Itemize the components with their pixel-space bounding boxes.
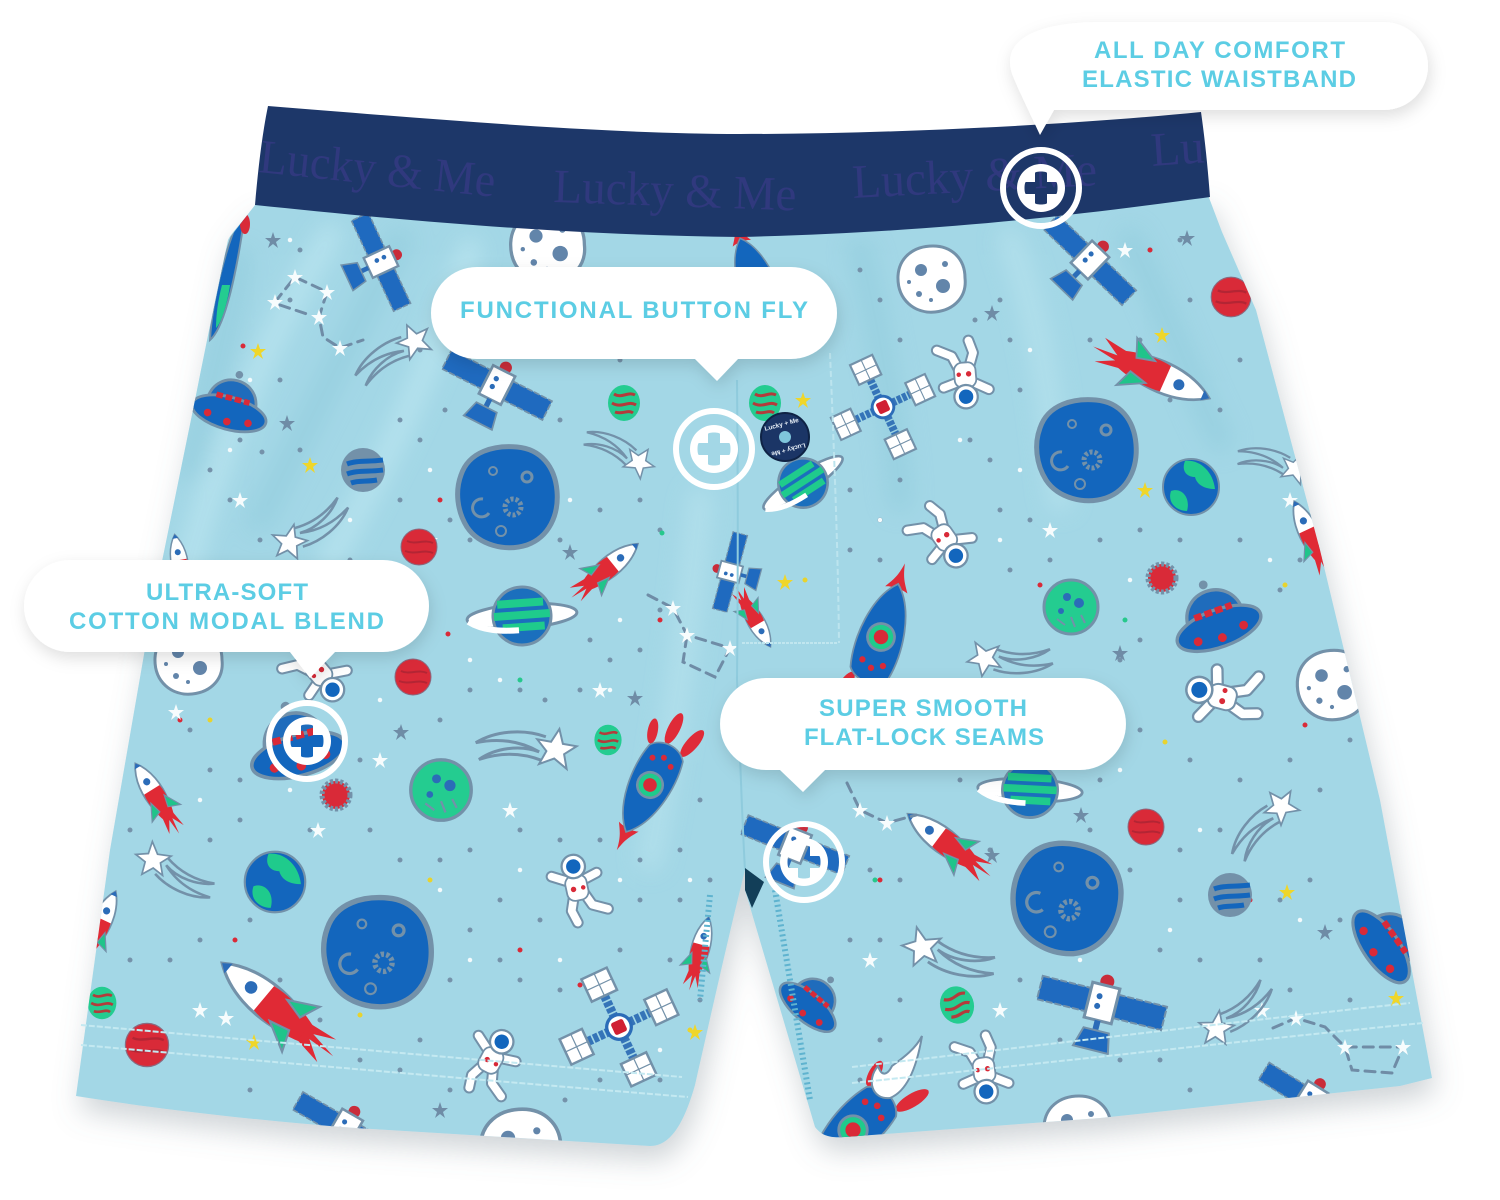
fly button [761, 413, 809, 461]
crotch opening shadow [745, 868, 764, 908]
print: ringed planets [465, 266, 1084, 820]
fly button: Lucky + Me [764, 417, 800, 433]
print: green planets [88, 385, 1098, 1029]
print: saucers [188, 361, 1445, 1040]
print: astronauts [277, 339, 1266, 1107]
fabric body [76, 195, 1432, 1146]
print: slate planets [341, 448, 1252, 917]
print: earth planets [245, 459, 1219, 912]
callout text: SUPER SMOOTH [819, 695, 1027, 722]
inseam overlock stitching [700, 890, 810, 1100]
callout: seams [720, 678, 1126, 792]
print: white stars [168, 242, 1298, 1026]
fabric prints [66, 204, 1445, 1200]
print: blue rockets [590, 212, 937, 1200]
callout: fabric blend [24, 560, 429, 678]
callout text: ULTRA-SOFT [146, 579, 308, 606]
print: satellites [277, 204, 1369, 1191]
callout text [69, 579, 384, 635]
print: blue asteroids [324, 400, 1136, 1007]
print: white comet flame [872, 1036, 922, 1098]
print: edge rocket [210, 214, 250, 340]
print: slate stars [265, 230, 1333, 1118]
hotspot: fabric [269, 703, 345, 779]
print: red rockets [66, 323, 1344, 1079]
print: yellow stars [246, 327, 1404, 1050]
print: moons [155, 210, 1368, 1189]
fabric folds [180, 235, 1220, 860]
callout: waistband [1010, 22, 1428, 135]
hotspot: seams [766, 824, 842, 900]
callout text [804, 695, 1044, 751]
print: constellation stars [267, 269, 1411, 1055]
callout text [1082, 37, 1356, 93]
waistband [255, 106, 1210, 237]
waistband woven logo text: Lucky & Me [553, 160, 797, 221]
fly placket and stitching [81, 353, 1423, 1097]
callout text: ELASTIC WAISTBAND [1082, 66, 1356, 93]
print: scattered dots [130, 240, 1350, 1100]
callout text: ALL DAY COMFORT [1094, 37, 1345, 64]
waistband woven logo text [257, 120, 1206, 221]
hotspot: waistband [1003, 150, 1079, 226]
waistband woven logo text: Lu [1149, 120, 1206, 177]
print: dashed constellations [275, 277, 1403, 1073]
callout: button fly [431, 267, 837, 381]
print: red planets [125, 277, 1251, 1067]
hotspot: button fly [676, 411, 752, 487]
fly button: Lucky + Me [770, 441, 806, 457]
waistband woven logo text: Lucky & Me [257, 130, 498, 208]
callout text: FUNCTIONAL BUTTON FLY [460, 297, 808, 324]
callout text: FLAT-LOCK SEAMS [804, 724, 1044, 751]
waistband woven logo text: Lucky & Me [851, 143, 1098, 209]
print: space stations [541, 338, 952, 1105]
print: shooting stars [128, 318, 1315, 1053]
callout text: COTTON MODAL BLEND [69, 608, 384, 635]
